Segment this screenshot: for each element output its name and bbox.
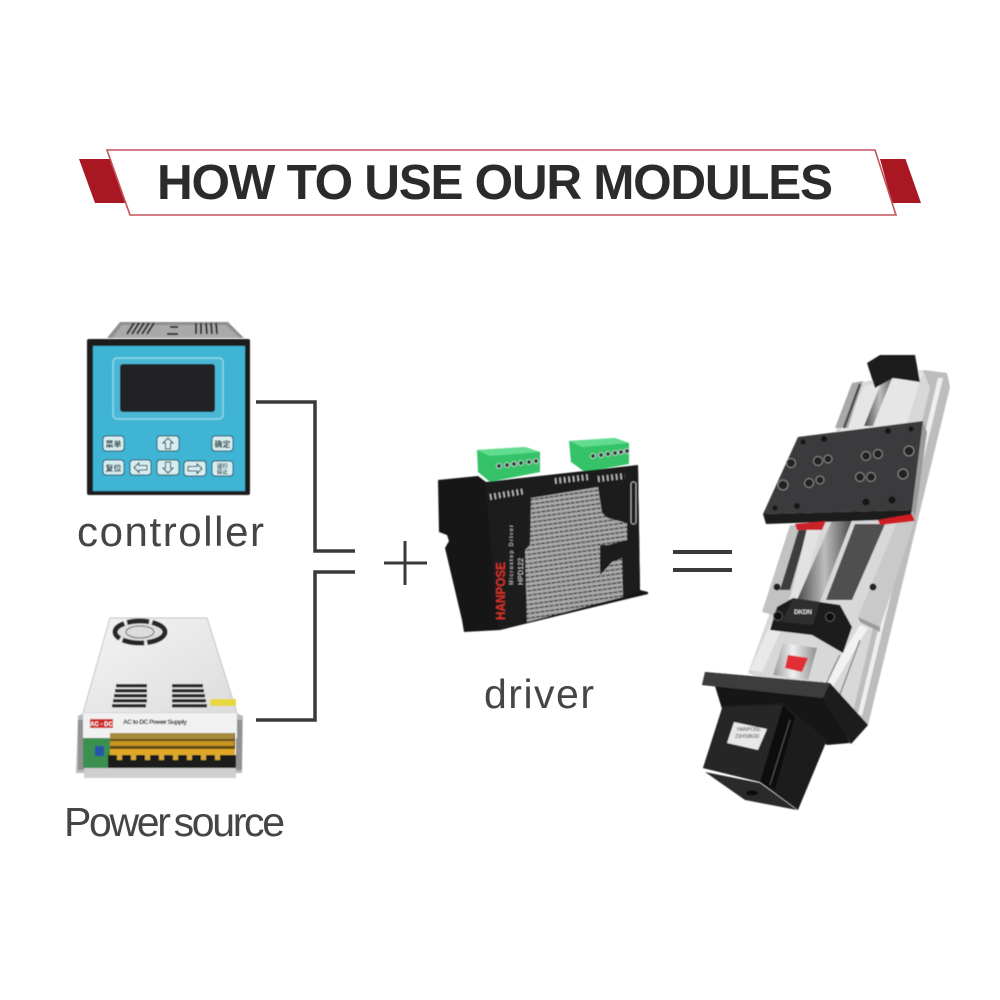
- banner panel: [107, 150, 896, 215]
- controller label: controller: [77, 508, 264, 555]
- icon: linear module: HANPOSE: [737, 727, 762, 733]
- icon: driver: HANPOSE: [493, 562, 508, 620]
- icon: controller: 停止: [217, 468, 228, 476]
- icon: driver: Microstep Driver: [509, 525, 515, 585]
- motor mount plate: [702, 672, 868, 744]
- top end block: [867, 355, 920, 388]
- right linear guide: [858, 520, 915, 627]
- icon: controller: [87, 322, 250, 495]
- icon: controller: 运行: [217, 462, 228, 470]
- ball screw: [864, 368, 896, 426]
- left linear guide: [835, 381, 863, 428]
- icon: power source: AC to DC Power Supply: [123, 719, 187, 726]
- bearing block: [770, 598, 852, 653]
- shadow channel under carriage: [826, 524, 885, 600]
- equals sign: [673, 552, 732, 570]
- power source label: Power source: [64, 799, 285, 845]
- motor underside: [715, 686, 850, 745]
- title: HOW TO USE OUR MODULES: [157, 155, 833, 210]
- icon: power source: AC - DC: [90, 722, 113, 728]
- icon: linear module: [702, 355, 950, 810]
- title banner: [79, 150, 921, 215]
- icon: power source: [76, 618, 243, 778]
- stepper motor: [703, 703, 827, 810]
- rail body: [748, 370, 950, 725]
- icon: driver: HPD122: [518, 558, 525, 585]
- icon: controller: 菜单: [106, 439, 122, 449]
- connector: power line: [256, 572, 355, 720]
- coupling: [773, 643, 817, 680]
- plus sign: [384, 541, 427, 585]
- connector: controller line: [256, 402, 355, 551]
- icon: linear module: 23HS8630: [735, 734, 759, 740]
- driver label: driver: [484, 671, 594, 717]
- icon: linear module: DKDN: [794, 609, 812, 616]
- icon: controller: 复位: [106, 463, 122, 473]
- banner left ribbon: [79, 159, 127, 203]
- icon: controller: 确定: [214, 439, 230, 449]
- carriage plate: [763, 421, 923, 514]
- driver spec table: [525, 487, 627, 622]
- banner right ribbon: [880, 159, 921, 203]
- icon: driver: [438, 438, 648, 632]
